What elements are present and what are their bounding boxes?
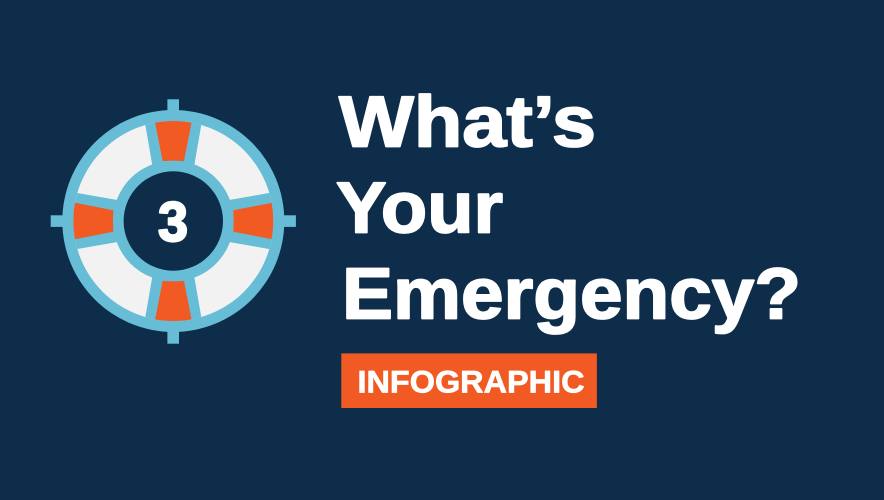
orange strap panels [71,119,275,323]
tag label: INFOGRAPHIC [358,363,584,399]
ring white body [73,121,273,321]
title line: Emergency?: Emergency? [342,255,801,335]
ring outer band [62,110,284,332]
title line: What's: What’s [339,83,596,163]
icon: life preserver ring [51,99,296,344]
tag: infographic [341,353,597,408]
ring inner band [113,161,234,281]
icon: crosshair ticks [51,99,296,344]
title line: Your: Your [336,169,503,249]
blue strap frames [71,119,275,323]
number 3: 3 [158,190,188,253]
ring centre hole [124,171,223,271]
banner canvas [50,93,798,408]
title [336,83,801,335]
ring straps [71,119,275,323]
tag background [341,353,597,408]
